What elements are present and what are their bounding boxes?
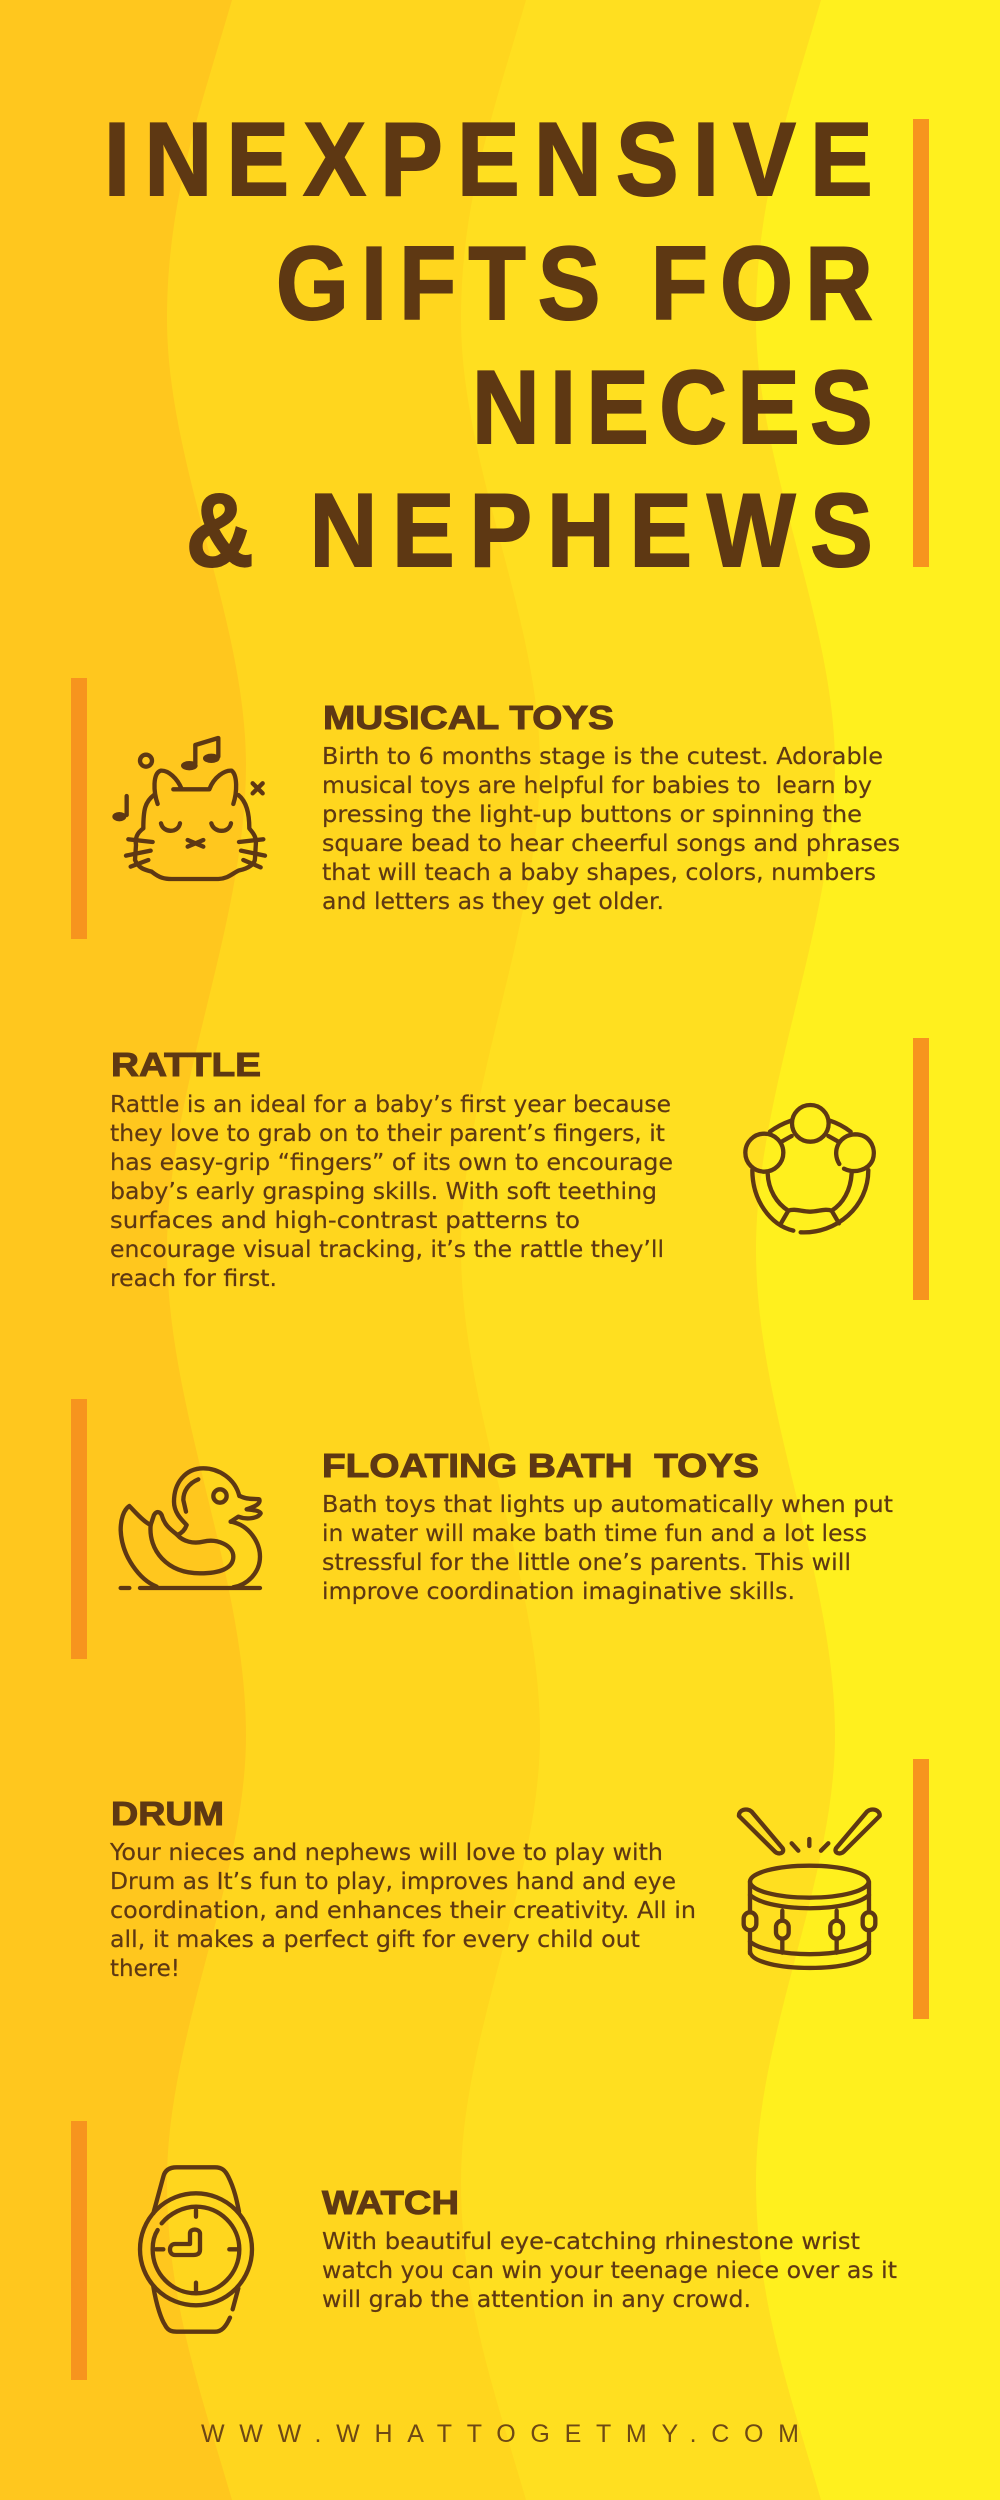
body text: coordination, and enhances their creativity. All in xyxy=(110,1898,696,1924)
body text: that will teach a baby shapes, colors, numbers xyxy=(322,860,876,886)
title: GIFTS FOR xyxy=(276,224,873,341)
body text xyxy=(110,1092,673,1292)
body text: Rattle is an ideal for a baby’s first year because xyxy=(110,1092,671,1118)
body text xyxy=(322,2229,897,2313)
accent bar xyxy=(71,678,87,939)
body text: in water will make bath time fun and a lot less xyxy=(322,1521,867,1547)
title: & NEPHEWS xyxy=(186,471,873,588)
icon: rattle xyxy=(745,1105,874,1232)
heading: DRUM xyxy=(111,1795,224,1832)
body text: reach for first. xyxy=(110,1266,277,1292)
title: NIECES xyxy=(472,348,873,465)
body text: With beautiful eye-catching rhinestone wrist xyxy=(322,2229,860,2255)
icon: drum and sticks xyxy=(739,1810,880,1968)
body text: there! xyxy=(110,1956,180,1982)
body text: square bead to hear cheerful songs and phrases xyxy=(322,831,900,857)
body text: Bath toys that lights up automatically when put xyxy=(322,1492,893,1518)
panel: watch xyxy=(71,2121,897,2380)
body text: Drum as It’s fun to play, improves hand and eye xyxy=(110,1869,676,1895)
body text: baby’s early grasping skills. With soft teething xyxy=(110,1179,657,1205)
body text: stressful for the little one’s parents. This will xyxy=(322,1550,851,1576)
panel: rattle xyxy=(110,1038,929,1300)
accent bar xyxy=(913,1038,929,1300)
heading: RATTLE xyxy=(111,1046,261,1083)
panel: floating bath toys xyxy=(71,1399,893,1659)
body text: musical toys are helpful for babies to learn by xyxy=(322,773,872,799)
icon: wrist watch xyxy=(140,2167,252,2332)
accent bar xyxy=(913,1759,929,2019)
body text: has easy-grip “fingers” of its own to encourage xyxy=(110,1150,673,1176)
accent bar xyxy=(71,2121,87,2380)
body text: they love to grab on to their parent’s fingers, it xyxy=(110,1121,665,1147)
heading: MUSICAL TOYS xyxy=(323,699,614,736)
body text: improve coordination imaginative skills. xyxy=(322,1579,795,1605)
icon: singing cat xyxy=(113,738,265,879)
icon: rubber duck xyxy=(121,1468,261,1588)
panel: drum xyxy=(109,1759,929,2019)
body text: all, it makes a perfect gift for every child out xyxy=(110,1927,640,1953)
title accent bar xyxy=(913,119,929,567)
body text: Birth to 6 months stage is the cutest. Adorable xyxy=(322,744,883,770)
body text: encourage visual tracking, it’s the rattle they’ll xyxy=(110,1237,664,1263)
footer url: WWW.WHATTOGETMY.COM xyxy=(201,2420,799,2448)
accent bar xyxy=(71,1399,87,1659)
heading: FLOATING BATH TOYS xyxy=(322,1447,759,1484)
body text: Your nieces and nephews will love to play with xyxy=(109,1840,663,1866)
title: INEXPENSIVE xyxy=(104,100,873,217)
body text: watch you can win your teenage niece over as it xyxy=(322,2258,897,2284)
body text xyxy=(322,744,900,915)
title xyxy=(104,100,873,588)
panel: musical toys xyxy=(71,678,900,939)
body text: and letters as they get older. xyxy=(322,889,664,915)
body text: surfaces and high-contrast patterns to xyxy=(110,1208,580,1234)
heading: WATCH xyxy=(322,2184,459,2221)
body text: pressing the light-up buttons or spinning the xyxy=(322,802,862,828)
body text: will grab the attention in any crowd. xyxy=(322,2287,751,2313)
body text xyxy=(109,1840,696,1982)
body text xyxy=(322,1492,893,1605)
